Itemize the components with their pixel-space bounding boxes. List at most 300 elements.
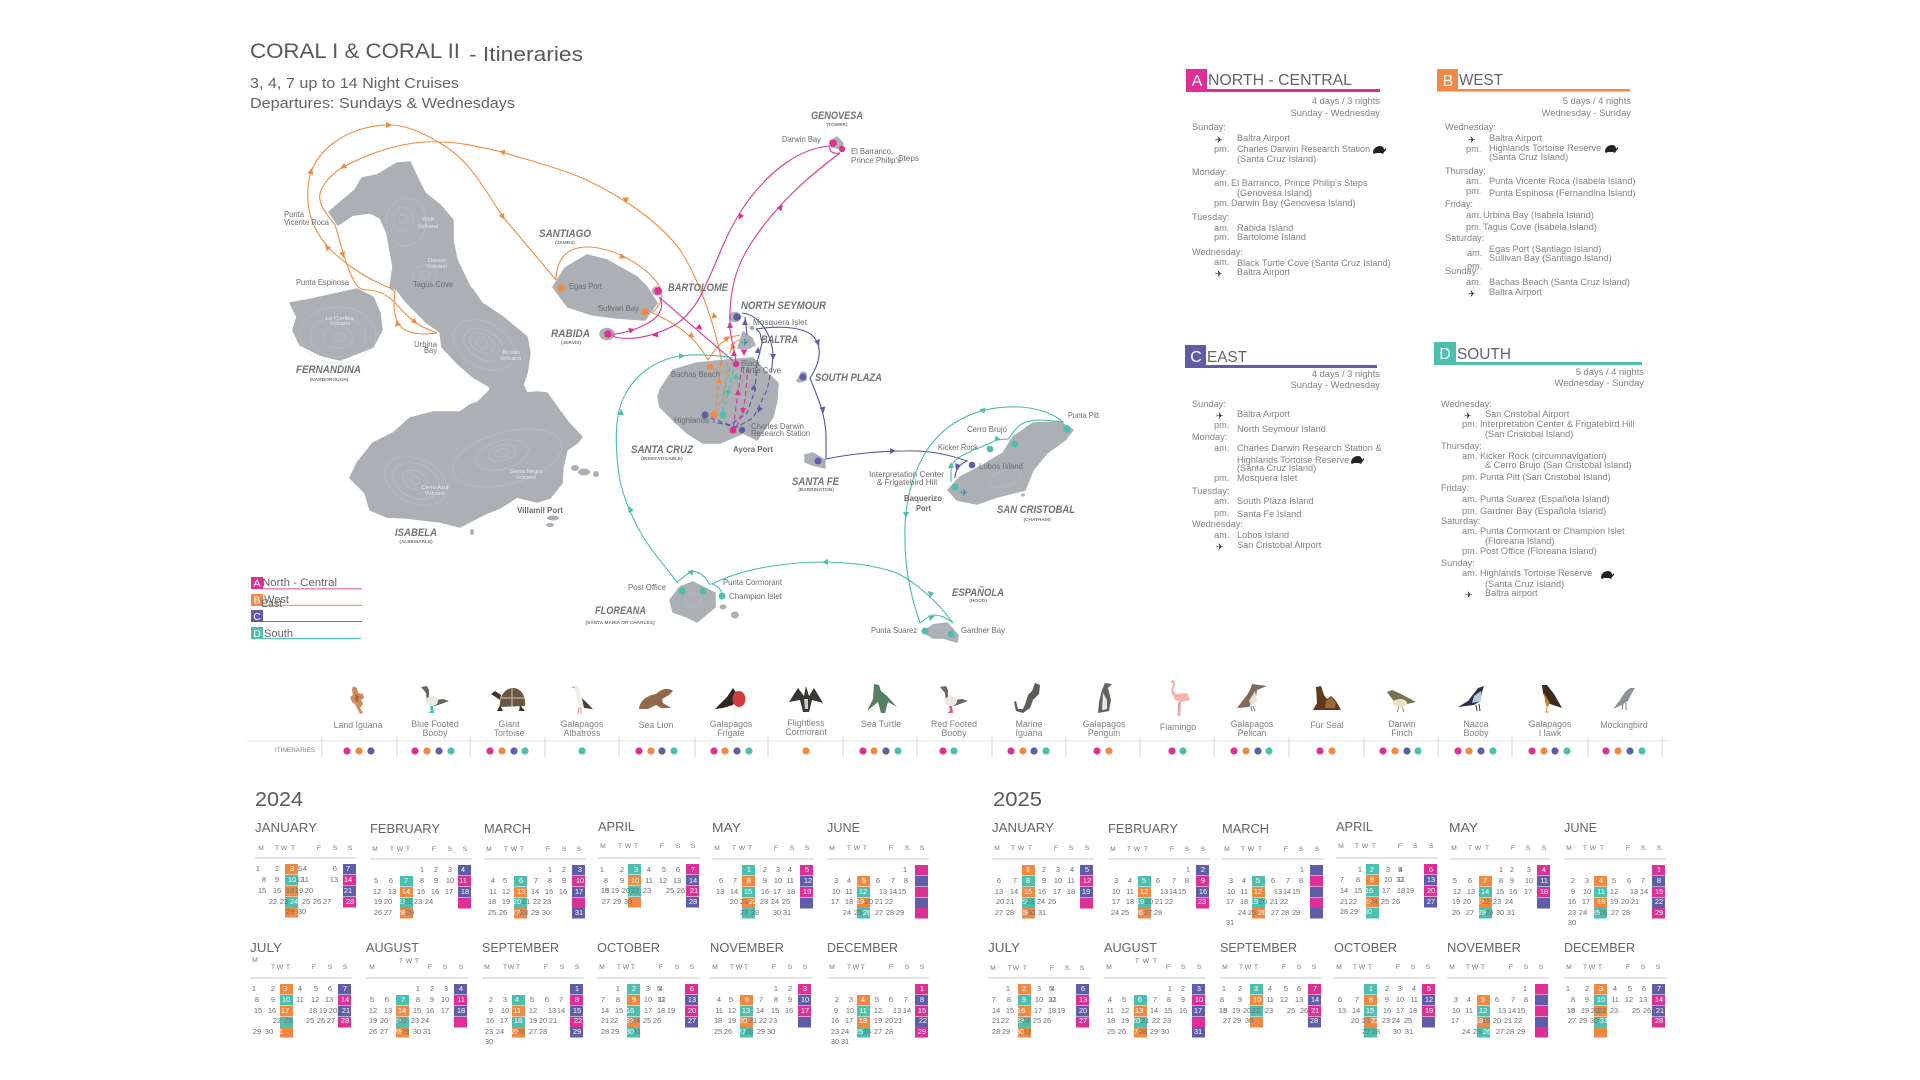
calendar: July 2024: 26 (317, 1016, 325, 1025)
calendar: February 2024: 7 (404, 876, 408, 885)
legend: B west (251, 594, 362, 606)
panel: C east itinerary: Charles Darwin Research Station & (1237, 443, 1382, 453)
calendar: February 2024: 6 (389, 876, 393, 885)
calendar: June 2024: 17 (831, 897, 839, 906)
map: island names: (NARBOROUGH) (310, 377, 349, 383)
calendar: February 2025: 16 (1199, 887, 1207, 896)
heading: C: C (1190, 349, 1202, 366)
calendar: September 2025: 14 (1311, 995, 1319, 1004)
calendar: April 2025: 21 (1340, 897, 1348, 906)
calendar: August 2025: 25 (1107, 1027, 1115, 1036)
calendar: February 2025: 11 (1126, 887, 1134, 896)
calendar: December 2024: 5 (875, 995, 879, 1004)
calendar: March 2024: 18 (488, 897, 496, 906)
wildlife table: ITINERARIES (275, 747, 315, 754)
calendar: October 2024: 8 (616, 995, 620, 1004)
calendar: May 2024: 23 (760, 897, 768, 906)
calendar: December 2025: 10 (1597, 995, 1605, 1004)
calendar: September 2024: 16 (486, 1016, 494, 1025)
calendar: March 2025: 15 (1292, 887, 1300, 896)
calendar: May 2025: MTWTFSS (1451, 845, 1547, 852)
calendar: November 2024: 3 (803, 984, 807, 993)
calendar: December 2025: 18 (1567, 1006, 1575, 1015)
calendar: April 2025: 18 (1397, 886, 1405, 895)
calendar: October 2025: 25 (1404, 1016, 1412, 1025)
calendar: May 2025: 17 (1524, 887, 1532, 896)
panel: C east itinerary: pm. (1214, 508, 1229, 518)
calendar: September 2024: 3 (503, 995, 507, 1004)
calendar: September 2024: 8 (575, 995, 579, 1004)
calendar: April 2024: 3 (634, 865, 638, 874)
calendar: December 2025 (1564, 940, 1666, 1038)
calendar: December 2025: 13 (1639, 995, 1647, 1004)
calendar: October 2025: OCTOBER (1334, 940, 1397, 955)
calendar: August 2024: 31 (423, 1027, 431, 1036)
calendar: December 2025: 8 (1571, 995, 1575, 1004)
calendar: April 2025: 23 (1364, 897, 1372, 906)
calendar: June 2025: 30 (1568, 918, 1576, 927)
animal: sea turtle: Sea Turtle (861, 719, 901, 729)
calendar: May 2025: 14 (1481, 887, 1489, 896)
calendar: April 2024: 2 (620, 865, 624, 874)
calendar: March 2024: 16 (559, 887, 567, 896)
calendar: June 2024: 28 (886, 908, 894, 917)
calendar: October 2024: 29 (611, 1027, 619, 1036)
calendar: February 2025: 24 (1111, 908, 1119, 917)
calendar: August 2024: 7 (401, 995, 405, 1004)
calendar: January 2025: 17 (1053, 887, 1061, 896)
calendar: December 2024: 25 (855, 1027, 863, 1036)
calendar: June 2025: 27 (1611, 908, 1619, 917)
calendar: April 2024 (598, 819, 700, 908)
calendar: November 2024: 8 (774, 995, 778, 1004)
calendar: February 2025: 7 (1172, 876, 1176, 885)
icon: tortoise (1373, 146, 1386, 154)
calendar: January 2024: 15 (258, 886, 266, 895)
island: Bartolome (652, 287, 662, 295)
calendar: January 2025: MTWTFSS (994, 845, 1090, 852)
calendar: August 2025: 21 (1141, 1016, 1149, 1025)
calendar: February 2024: 15 (417, 887, 425, 896)
animal: fur seal (1310, 686, 1344, 730)
panel: D south itinerary: pm. (1462, 419, 1477, 429)
calendar: August 2025: 12 (1121, 1006, 1129, 1015)
calendar: June 2025: 16 (1568, 897, 1576, 906)
calendar: March 2025: 27 (1271, 908, 1279, 917)
calendar: January 2024: 26 (313, 897, 321, 906)
calendar: July 2024: 12 (311, 995, 319, 1004)
calendar: September 2025: 12 (1280, 995, 1288, 1004)
calendar: May 2025: 21 (1477, 897, 1485, 906)
calendar: February 2024: 9 (434, 876, 438, 885)
calendar: October 2025: 19 (1425, 1006, 1433, 1015)
calendar: December 2024: 9 (834, 1006, 838, 1015)
calendar: April 2024: 10 (631, 876, 639, 885)
panel: B west itinerary: pm. (1466, 144, 1481, 154)
calendar: November 2025: 11 (1465, 1006, 1473, 1015)
calendar: August 2025: 2 (1181, 984, 1185, 993)
calendar: May 2025: 10 (1525, 876, 1533, 885)
calendar: September 2024: 11 (513, 1006, 521, 1015)
map: volcano labels: Volcano (330, 321, 350, 327)
calendar: July 2024: 13 (325, 995, 333, 1004)
map: island names: (HOOD) (969, 598, 987, 604)
calendar: March 2025: 25 (1248, 908, 1256, 917)
calendar: January 2025: 15 (1024, 887, 1032, 896)
calendar: July 2024: 8 (255, 995, 259, 1004)
calendar: May 2024: 4 (788, 865, 792, 874)
calendar: September 2024: MTWTFSS (484, 964, 580, 971)
calendar: October 2025: 18 (1409, 1006, 1417, 1015)
calendar: October 2025: 2 (1385, 984, 1389, 993)
calendar: December 2024: 11 (859, 1006, 867, 1015)
calendar: February 2025 (1108, 821, 1210, 918)
year heading: 2024: 2024 (255, 789, 303, 811)
calendar: March 2024: 17 (575, 887, 583, 896)
calendar: October 2024: 28 (601, 1027, 609, 1036)
calendar: August 2024: 23 (411, 1016, 419, 1025)
calendar: July 2025: 22 (1001, 1016, 1009, 1025)
title: CORAL I & CORAL II (250, 40, 460, 63)
calendar: March 2025: 26 (1258, 908, 1266, 917)
calendar: April 2025: 6 (1429, 865, 1433, 874)
island: Isabela (329, 162, 582, 527)
heading: A: NORTH - CENTRAL (1208, 72, 1352, 89)
calendar: March 2025: 5 (1256, 876, 1260, 885)
calendar: July 2025: 19 (1057, 1006, 1065, 1015)
map: island names: SAN CRISTOBAL (997, 504, 1075, 516)
calendar: July 2025: 17 (1034, 1006, 1042, 1015)
panel: B west itinerary: Highlands Tortoise Reserve (1489, 143, 1601, 153)
calendar: March 2025: 22 (1280, 897, 1288, 906)
calendar: November 2025: 1 (1523, 984, 1527, 993)
calendar: September 2024: 5 (530, 995, 534, 1004)
calendar: May 2024: 10 (774, 876, 782, 885)
calendar: December 2025: 11 (1611, 995, 1619, 1004)
calendar: June 2025: 13 (1630, 887, 1638, 896)
calendar: November 2024: 12 (728, 1006, 736, 1015)
calendar: September 2025: 3 (1254, 984, 1258, 993)
calendar: May 2025: 12 (1453, 887, 1461, 896)
island: Santa Cruz (658, 358, 778, 443)
calendar: April 2025: 4 (1399, 865, 1403, 874)
calendar: August 2025: 10 (1195, 995, 1203, 1004)
calendar: October 2024: 1 (616, 984, 620, 993)
calendar: October 2024: 19 (667, 1006, 675, 1015)
calendar: May 2025: 24 (1505, 897, 1513, 906)
calendar: May 2024: 16 (761, 887, 769, 896)
calendar: May 2024: 12 (804, 876, 812, 885)
calendar: August 2024: 1 (416, 984, 420, 993)
panel: B west itinerary: Friday: (1445, 199, 1473, 209)
calendar: June 2025: 17 (1582, 897, 1590, 906)
calendar: June 2025: 1 (1657, 865, 1661, 874)
panel: D south itinerary: Saturday: (1441, 516, 1480, 526)
panel: C east itinerary: Sunday: (1192, 399, 1226, 409)
panel: A north-central itinerary: Baltra Airport (1237, 267, 1291, 277)
calendar: April 2025: 16 (1365, 886, 1373, 895)
calendar: May 2024: MTWTFSS (714, 845, 810, 852)
calendar: April 2024: 29 (613, 897, 621, 906)
panel: A north-central itinerary: Monday: (1192, 167, 1227, 177)
calendar: December 2024: 10 (846, 1006, 854, 1015)
map: island names: BALTRA (761, 334, 798, 346)
calendar: November 2024: 17 (801, 1006, 809, 1015)
calendar: June 2025: 26 (1599, 908, 1607, 917)
calendar: May 2025: 11 (1540, 876, 1548, 885)
animal: galapagos hawk (1529, 685, 1572, 738)
calendar: September 2025: 18 (1219, 1006, 1227, 1015)
animal: nazca booby: Booby (1464, 728, 1489, 738)
calendar: May 2025: 23 (1493, 897, 1501, 906)
calendar: May 2024: 7 (733, 876, 737, 885)
calendar: February 2025: 25 (1121, 908, 1129, 917)
calendar: January 2024: 18 (286, 886, 294, 895)
map: volcano labels: Sierra Negra (510, 469, 543, 475)
calendar: December 2025: 2 (1585, 984, 1589, 993)
panel: D south itinerary: San Cristobal Airport (1485, 409, 1570, 419)
calendar: September 2024: 12 (529, 1006, 537, 1015)
calendar: May 2024: 19 (803, 887, 811, 896)
calendar: November 2025: 27 (1496, 1027, 1504, 1036)
animal: fur seal: Fur Seal (1310, 720, 1344, 730)
calendar: September 2025: 26 (1300, 1006, 1308, 1015)
calendar: December 2024: 29 (918, 1027, 926, 1036)
calendar: February 2024: 3 (448, 865, 452, 874)
calendar: February 2024 (370, 821, 472, 918)
panel: B west itinerary: am. (1466, 210, 1481, 220)
animal: galapagos frigate: Galapagos (710, 719, 753, 729)
legend: D south: South (264, 628, 293, 640)
legend: A north-central: A (253, 578, 261, 590)
legend: B west: West (264, 594, 289, 606)
calendar: November 2024: 29 (757, 1027, 765, 1036)
calendar: July 2025: 23 (1016, 1016, 1024, 1025)
panel: C east itinerary: pm. (1214, 420, 1229, 430)
calendar: October 2024: 26 (653, 1016, 661, 1025)
calendar: March 2024: 28 (520, 908, 528, 917)
map: island names: SANTA FE (792, 476, 840, 488)
calendar: June 2025: 28 (1622, 908, 1630, 917)
calendar: March 2024: 1 (548, 865, 552, 874)
calendar: September 2024: 21 (549, 1016, 557, 1025)
calendar: March 2025: 14 (1283, 887, 1291, 896)
calendar: December 2024: 23 (831, 1027, 839, 1036)
legend: D south: D (253, 628, 261, 640)
calendar: November 2024: 10 (801, 995, 809, 1004)
calendar: March 2025: 17 (1226, 897, 1234, 906)
calendar: November 2025: 26 (1483, 1027, 1491, 1036)
calendar: October 2025: 3 (1398, 984, 1402, 993)
animal: flamingo: Flamingo (1160, 722, 1196, 732)
calendar: July 2024: 15 (254, 1006, 262, 1015)
calendar: March 2024: 5 (503, 876, 507, 885)
calendar: July 2025: 13 (1079, 995, 1087, 1004)
calendar: September 2025: 30 (1245, 1016, 1253, 1025)
calendar: January 2025: 22 (1020, 897, 1028, 906)
calendar: November 2024: 16 (785, 1006, 793, 1015)
panel: C east itinerary: Lobos Island (1237, 530, 1289, 540)
calendar: June 2025: 19 (1610, 897, 1618, 906)
calendar: April 2024: 1 (600, 865, 604, 874)
calendar: September 2024 (482, 940, 584, 1046)
animal: nazca booby (1458, 686, 1489, 738)
calendar: April 2025: 14 (1340, 886, 1348, 895)
calendar: February 2024: 16 (431, 887, 439, 896)
calendar: April 2025: 19 (1406, 886, 1414, 895)
calendar: July 2024: 20 (329, 1006, 337, 1015)
panel: D south itinerary: Kicker Rock (circumnavigation) (1480, 451, 1607, 461)
calendar: October 2024: 9 (632, 995, 636, 1004)
panel: B west itinerary: Tagus Cove (Isabela Island) (1483, 222, 1597, 232)
calendar: April 2025: 11 (1397, 875, 1405, 884)
heading: C: EAST (1207, 349, 1247, 366)
calendar: September 2024: 13 (548, 1006, 556, 1015)
calendar: November 2025: 19 (1482, 1016, 1490, 1025)
animal: blue footed booby: Blue Footed (411, 719, 459, 729)
panel: C east itinerary: 4 days / 3 nights (1312, 368, 1380, 379)
calendar: June 2025: 15 (1655, 887, 1663, 896)
calendar: May 2024: 8 (747, 876, 751, 885)
calendar: August 2025: 6 (1138, 995, 1142, 1004)
panel: C east itinerary: am. (1214, 443, 1229, 453)
calendar: March 2025: 28 (1281, 908, 1289, 917)
calendar: November 2025: 7 (1511, 995, 1515, 1004)
calendar: April 2024: 26 (677, 886, 685, 895)
calendar: April 2025: 7 (1340, 875, 1344, 884)
calendar: March 2024: MARCH (484, 821, 531, 836)
calendar: July 2024: 4 (298, 984, 302, 993)
calendar: June 2024: 22 (885, 897, 893, 906)
calendar: August 2024: 11 (457, 995, 465, 1004)
calendar: August 2025: AUGUST (1104, 940, 1157, 955)
animal: red footed booby (931, 686, 977, 738)
calendar: August 2024: 16 (426, 1006, 434, 1015)
calendar: August 2024: 4 (459, 984, 463, 993)
calendar: February 2024: 2 (434, 865, 438, 874)
calendar: February 2024: 28 (397, 908, 405, 917)
calendar: June 2025: 4 (1599, 876, 1603, 885)
island: Santiago (553, 255, 657, 320)
calendar: August 2024 (366, 940, 468, 1038)
panel: D south itinerary: Wednesday - Sunday (1555, 377, 1644, 388)
calendar: October 2024: 20 (688, 1006, 696, 1015)
icon: tortoise (1605, 145, 1618, 153)
calendar: February 2024: MTWTFSS (372, 846, 468, 853)
panel: A north-central itinerary: am. (1214, 257, 1229, 267)
calendar: January 2024: 23 (280, 897, 288, 906)
calendar: February 2025: 4 (1128, 876, 1132, 885)
heading: D: D (1439, 346, 1451, 363)
calendar: September 2024: 30 (485, 1037, 493, 1046)
panel: D south itinerary (1434, 342, 1644, 601)
calendar: August 2025: 13 (1135, 1006, 1143, 1015)
calendar: April 2025: 13 (1427, 875, 1435, 884)
calendar: January 2024: 28 (346, 897, 354, 906)
calendar: September 2025: 25 (1287, 1006, 1295, 1015)
calendar: April 2025: 10 (1384, 875, 1392, 884)
heading: D: SOUTH (1457, 346, 1511, 363)
calendar: October 2025: 10 (1396, 995, 1404, 1004)
calendar: February 2025: 5 (1142, 876, 1146, 885)
calendar: March 2024: 2 (562, 865, 566, 874)
calendar: June 2025: 11 (1597, 887, 1605, 896)
panel: A north-central itinerary: pm. (1214, 232, 1229, 242)
calendar: November 2024: 1 (774, 984, 778, 993)
calendar: July 2025: 25 (1033, 1016, 1041, 1025)
calendar: September 2025: 22 (1252, 1006, 1260, 1015)
routes: A north-central (magenta) (613, 146, 840, 430)
calendar: June 2024: 19 (856, 897, 864, 906)
calendar: May 2025: 27 (1466, 908, 1474, 917)
calendar: April 2024: 27 (602, 897, 610, 906)
calendar: December 2024: 3 (849, 995, 853, 1004)
calendar: September 2025: 6 (1297, 984, 1301, 993)
calendar: March 2024: 15 (545, 887, 553, 896)
heading: A (1186, 69, 1380, 92)
calendar: December 2024: 28 (885, 1027, 893, 1036)
calendar: August 2025: 22 (1152, 1016, 1160, 1025)
panel: D south itinerary: Baltra airport (1485, 588, 1538, 598)
calendar: April 2024: 5 (662, 865, 666, 874)
calendar: January 2025: 27 (995, 908, 1003, 917)
title (250, 40, 583, 66)
calendar: December 2024: 17 (845, 1016, 853, 1025)
calendar: July 2024: 11 (296, 995, 304, 1004)
calendar: September 2025: 15 (1219, 1006, 1227, 1015)
calendar: January 2024: 19 (295, 886, 303, 895)
panel: A north-central itinerary: Charles Darwin Research Station (1237, 144, 1370, 154)
calendar: January 2025: 24 (1037, 897, 1045, 906)
calendar: March 2025: 31 (1226, 918, 1234, 927)
calendar: January 2025: 29 (1020, 908, 1028, 917)
calendar: March 2024: 13 (517, 887, 525, 896)
animal: mockingbird: Mockingbird (1600, 720, 1648, 730)
calendar: November 2024: 21 (749, 1016, 757, 1025)
calendar: December 2025: 27 (1568, 1016, 1576, 1025)
calendar: December 2025: 9 (1585, 995, 1589, 1004)
calendar: June 2024: 25 (854, 908, 862, 917)
panel: D south itinerary: Interpretation Center & Frigatebird Hill (1480, 419, 1635, 429)
calendar: October 2024: 30 (626, 1027, 634, 1036)
calendar: October 2025: 9 (1385, 995, 1389, 1004)
calendar: January 2025: 21 (1006, 897, 1014, 906)
calendar: July 2025: MTWTFSS (990, 965, 1085, 972)
calendar: July 2024: 16 (268, 1006, 276, 1015)
heading: B (1437, 69, 1630, 92)
map: island names: FERNANDINA (296, 364, 361, 376)
calendar: March 2024: 27 (512, 908, 520, 917)
calendar: March 2024: 7 (534, 876, 538, 885)
calendar: January 2025: 19 (1082, 887, 1090, 896)
icon: tortoise (1351, 456, 1364, 464)
map: visitor site labels: Egas Port (569, 281, 603, 291)
calendar: January 2025: 31 (1038, 908, 1046, 917)
calendar: September 2024: 15 (573, 1006, 581, 1015)
calendar: July 2025: 3 (1037, 984, 1041, 993)
map: visitor site labels: Black (741, 358, 761, 368)
calendar: August 2024: 28 (394, 1027, 402, 1036)
calendar: January 2025: 1 (1026, 865, 1030, 874)
map: visitor site labels: Research Station (751, 428, 810, 438)
calendar: April 2024: 25 (666, 886, 674, 895)
calendar: April 2024: 22 (631, 886, 639, 895)
panel: C east itinerary: North Seymour Island (1237, 424, 1326, 434)
calendar: June 2025: 24 (1579, 908, 1587, 917)
calendar: December 2025: MTWTFSS (1566, 964, 1661, 971)
map: visitor site labels: Champion Islet (729, 591, 783, 601)
calendar: May 2025: 8 (1499, 876, 1503, 885)
